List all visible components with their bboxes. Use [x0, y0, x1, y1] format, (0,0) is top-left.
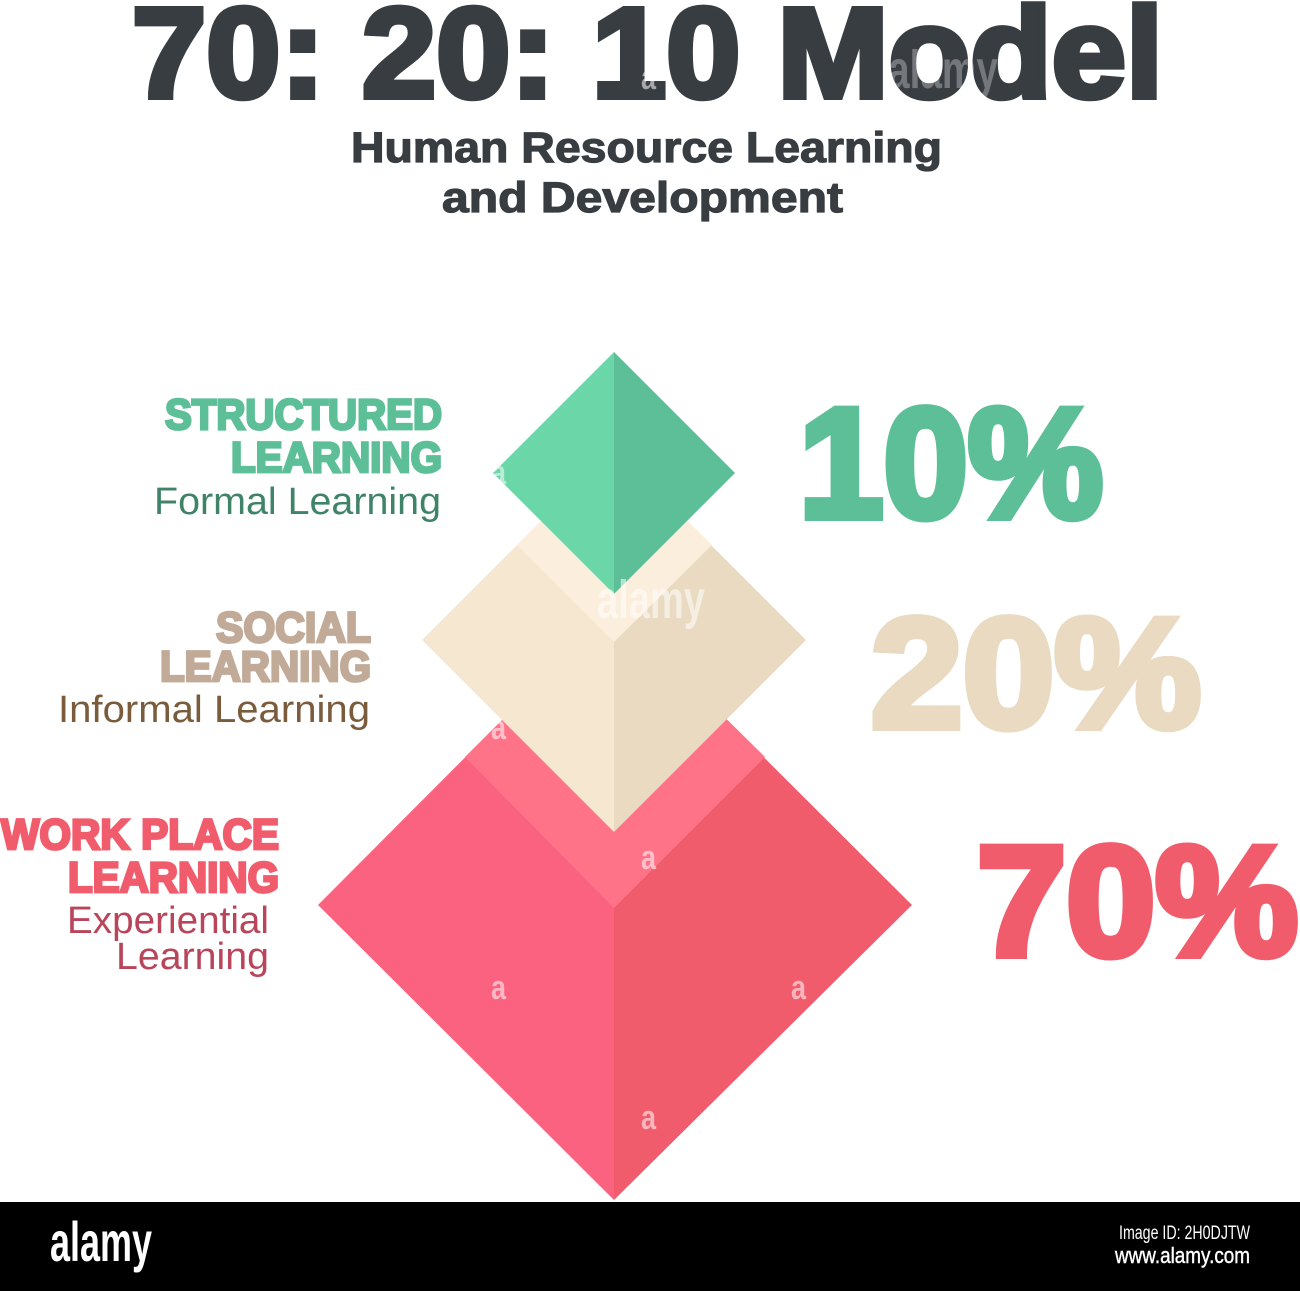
diamond: structured learning 10% — [493, 352, 735, 594]
watermarks: alamy — [888, 40, 998, 100]
footer bar — [0, 1202, 1300, 1291]
watermarks: a — [791, 969, 807, 1007]
watermarks: a — [491, 969, 507, 1007]
label: structured learning: Formal Learning — [154, 481, 441, 523]
watermarks: a — [491, 709, 507, 747]
watermarks: a — [641, 1099, 657, 1137]
watermarks — [491, 40, 998, 1137]
label: social learning: Informal Learning — [58, 689, 370, 731]
label: work place learning: WORK PLACE — [1, 811, 279, 859]
label: structured learning — [154, 391, 442, 523]
label: structured learning: LEARNING — [231, 434, 442, 482]
subtitle — [351, 124, 942, 222]
subtitle: Human Resource Learning — [351, 124, 942, 172]
website: www.alamy.com — [1114, 1243, 1250, 1268]
percentage: 20%: 20% — [871, 587, 1201, 761]
watermarks: a — [641, 59, 657, 97]
watermarks: a — [491, 454, 507, 492]
label: structured learning: STRUCTURED — [165, 391, 442, 439]
watermarks: a — [641, 839, 657, 877]
diamond: social learning 20% — [422, 448, 806, 832]
percentage: 70%: 70% — [977, 815, 1298, 989]
label: social learning: LEARNING — [160, 643, 371, 691]
label: social learning — [58, 604, 371, 731]
diagram: stacked diamonds — [318, 352, 912, 1200]
image id: Image ID: 2H0DJTW — [1119, 1223, 1250, 1244]
watermarks: alamy — [597, 570, 705, 630]
label: work place learning: Experiential — [67, 900, 269, 942]
label: social learning: SOCIAL — [216, 604, 371, 652]
label: work place learning — [1, 811, 279, 978]
diamond: workplace learning 70% — [318, 608, 912, 1200]
label: work place learning: LEARNING — [68, 854, 279, 902]
subtitle: and Development — [442, 174, 843, 222]
footer logo: alamy — [50, 1210, 152, 1273]
label: work place learning: Learning — [116, 936, 269, 978]
percentage: 10%: 10% — [799, 377, 1103, 551]
